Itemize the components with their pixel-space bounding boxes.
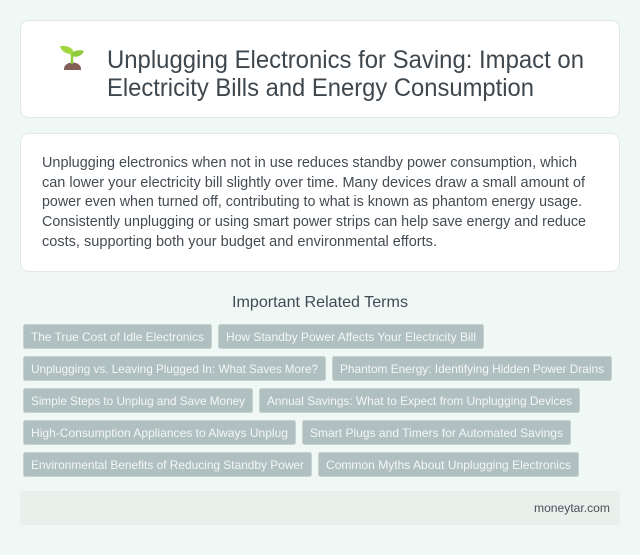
tag [24, 420, 296, 444]
tag [24, 452, 312, 476]
title text: Unplugging Electronics for Saving: Impact on [107, 46, 584, 74]
tag: Smart Plugs and Timers for Automated Savings [310, 426, 563, 440]
panel: description card [20, 134, 620, 272]
tag list [24, 324, 612, 476]
icon: sprout [60, 46, 84, 70]
tag [24, 324, 212, 348]
title text: Electricity Bills and Energy Consumption [107, 74, 534, 102]
tag: Annual Savings: What to Expect from Unplugging Devices [267, 394, 572, 408]
tag [302, 420, 570, 444]
panel: title card [20, 20, 620, 118]
description text: can lower your electricity bill slightly over time. Many devices draw a small amount of [42, 175, 586, 191]
tag: Common Myths About Unplugging Electronics [326, 458, 571, 472]
footer [20, 491, 620, 525]
tag: Simple Steps to Unplug and Save Money [31, 394, 245, 408]
description text: costs, supporting both your budget and environmental efforts. [42, 234, 437, 250]
tag [24, 388, 252, 412]
tag: The True Cost of Idle Electronics [31, 330, 204, 344]
title text [107, 46, 584, 102]
tag: How Standby Power Affects Your Electricity Bill [226, 330, 476, 344]
description text: Unplugging electronics when not in use reduces standby power consumption, which [42, 155, 577, 171]
description text: power even when turned off, contributing to what is known as phantom energy usage. [42, 194, 582, 210]
tag [318, 452, 578, 476]
tag: Environmental Benefits of Reducing Standby Power [31, 458, 304, 472]
heading: important related terms: Important Related Terms [232, 294, 408, 311]
tag: Phantom Energy: Identifying Hidden Power Drains [340, 362, 604, 376]
tag [260, 388, 580, 412]
description text [42, 155, 586, 250]
tag [218, 324, 484, 348]
tag: Unplugging vs. Leaving Plugged In: What Saves More? [31, 362, 318, 376]
footer source: moneytar.com [534, 501, 610, 515]
tag [24, 356, 326, 380]
tag: High-Consumption Appliances to Always Unplug [31, 426, 288, 440]
description text: Consistently unplugging or using smart power strips can help save energy and reduce [42, 214, 586, 230]
tag [332, 356, 612, 380]
